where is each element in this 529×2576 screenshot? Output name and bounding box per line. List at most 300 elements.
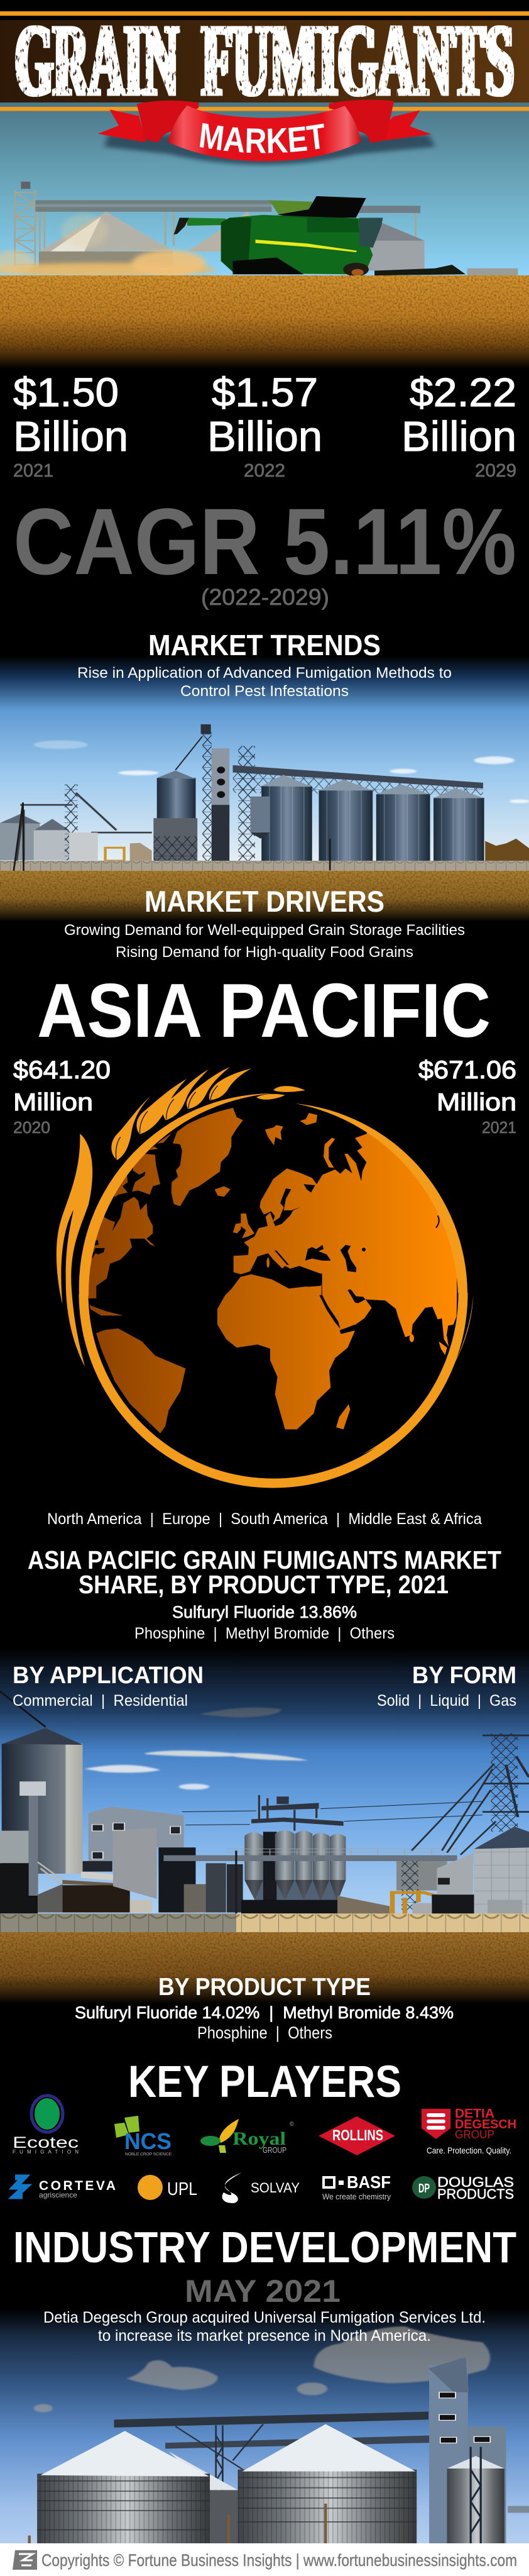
- shield bars: [428, 2115, 444, 2128]
- Canada and United States: [86, 1197, 155, 1298]
- footer: [0, 2543, 529, 2576]
- Mediterranean: [241, 1253, 322, 1288]
- unit: Billion: [401, 413, 516, 460]
- tower top: [428, 2357, 469, 2392]
- highlighted share: Sulfuryl Fluoride 13.86%: [172, 1603, 357, 1622]
- logo: NCS: [114, 2116, 172, 2157]
- dark lower left: [0, 1863, 38, 1913]
- name line two: DEGESCH: [455, 2118, 516, 2131]
- left blade: [57, 1134, 92, 1367]
- left silo ribs: [37, 2474, 210, 2543]
- illustration: silos and combine harvester: [0, 182, 518, 277]
- name line one: DETIA: [455, 2107, 494, 2121]
- ring left taper: [79, 1093, 271, 1295]
- small cloud: [84, 1765, 160, 1772]
- emblem: [412, 2176, 436, 2199]
- shed roof: [62, 1880, 131, 1886]
- combine: rear wheel: [343, 263, 369, 276]
- year: 2021: [13, 461, 53, 481]
- logo block: [13, 2550, 37, 2570]
- poles: [30, 2504, 325, 2543]
- Persian Gulf: [347, 1290, 366, 1303]
- hopper: [250, 832, 270, 839]
- mid silo 1: [244, 1832, 263, 1900]
- illustration: industrial facility: [0, 1691, 529, 1936]
- clouds: [34, 741, 529, 803]
- left fence: [0, 1913, 236, 1933]
- ground texture: [0, 871, 529, 909]
- wheat texture: [0, 275, 529, 351]
- subtitle: agriscience: [39, 2191, 77, 2199]
- Americas west: detailed land: [86, 1105, 243, 1298]
- tagline: Care. Protection. Quality.: [427, 2145, 511, 2155]
- ribbon shadow: [104, 135, 435, 165]
- fruit: [138, 2175, 163, 2200]
- right silo bands: [238, 2477, 417, 2522]
- items: Commercial | Residential: [13, 1692, 188, 1710]
- pole: [235, 1850, 237, 1933]
- logo: Royal Group: [200, 2119, 294, 2155]
- combine: body shadow: [221, 218, 251, 272]
- stat 2021: [13, 370, 128, 481]
- name line three: GROUP: [455, 2128, 494, 2141]
- combine: auger: [187, 218, 226, 226]
- right silo panels: [474, 1847, 529, 1920]
- clouds: [34, 2326, 490, 2413]
- grain 3: [163, 1070, 209, 1120]
- small cloud two: [179, 1784, 209, 1789]
- wordmark: UPL: [167, 2179, 197, 2199]
- by form: [377, 1662, 516, 1710]
- White Sea: [303, 1184, 315, 1193]
- tower head: [201, 724, 211, 734]
- value: $671.06: [418, 1056, 516, 1084]
- Cuba and Antilles: [89, 1305, 123, 1315]
- second small silo cone: [35, 819, 69, 830]
- leaves: [114, 2116, 139, 2138]
- yellow frame: [106, 848, 124, 861]
- unit: Billion: [207, 413, 322, 460]
- year: 2022: [244, 461, 285, 481]
- value: $2.22: [410, 370, 516, 415]
- panel: segmentation photo: [0, 1649, 529, 2042]
- right gantry: [357, 206, 420, 213]
- ring right taper: [295, 1103, 467, 1293]
- combine: upper panel: [266, 216, 359, 232]
- line one: Detia Degesch Group acquired Universal Fumigation Services Ltd.: [43, 2309, 486, 2326]
- Eurasia: [234, 1129, 457, 1347]
- wordmark: BASF: [347, 2172, 391, 2192]
- tower lattice: [202, 727, 212, 861]
- back building: [396, 1861, 447, 1891]
- gantry lattice: [233, 772, 483, 795]
- label curve: [198, 146, 329, 153]
- green leaf: [200, 2136, 221, 2146]
- subtitle: NOBLE CROP SCIENCE: [125, 2153, 172, 2157]
- grain 2: [136, 1079, 187, 1134]
- mid silo 4: [313, 1833, 329, 1901]
- trees: [485, 839, 529, 865]
- small silo lattice: [471, 2447, 481, 2543]
- Gulf of Thailand: [447, 1325, 454, 1338]
- date: MAY 2021: [185, 2274, 341, 2309]
- ribbon shapes: [98, 100, 435, 165]
- name line two: PRODUCTS: [437, 2186, 514, 2202]
- left lines: [15, 793, 152, 872]
- right silo: [474, 1847, 529, 1920]
- grain veins: [116, 1086, 218, 1159]
- Victoria Island: [111, 1174, 128, 1197]
- window 1: [439, 2392, 455, 2398]
- fence: [0, 861, 529, 872]
- left silo cone highlight: [51, 216, 101, 252]
- cables: [412, 1764, 496, 1855]
- distant fence: [467, 268, 518, 275]
- icon: wheat globe: [57, 1067, 473, 1483]
- tall silo: [157, 778, 195, 819]
- lower gantry: [165, 2436, 429, 2448]
- center band: [168, 106, 361, 161]
- small silo roof: [447, 2456, 504, 2468]
- conveyor rail: [226, 1849, 457, 1855]
- lower beam: [251, 1818, 344, 1826]
- logo: Solvay: [222, 2172, 300, 2203]
- rear building: [467, 2426, 506, 2543]
- Corsica and Sardinia: [266, 1258, 270, 1268]
- window two: [113, 1823, 124, 1830]
- silo 1 ribs: [261, 786, 312, 862]
- upper beam: [261, 1803, 319, 1810]
- back building lattice: [401, 1861, 418, 1911]
- panel: market size stats: [13, 370, 516, 610]
- emblem globe: [35, 2098, 60, 2130]
- window 4: [474, 2436, 490, 2442]
- cloud two: [314, 2326, 490, 2383]
- dark supports: [158, 1847, 195, 1913]
- value: $1.50: [13, 370, 119, 415]
- mid silo 3: [295, 1831, 312, 1900]
- silo 3 ribs: [376, 794, 430, 864]
- photo: sky: [0, 2309, 529, 2544]
- silo 4: [434, 798, 484, 865]
- illustration: silos: [30, 2326, 529, 2543]
- panel: industry development photo: [0, 2309, 529, 2544]
- right silo cone: [368, 223, 425, 241]
- left small silo cone: [0, 814, 41, 824]
- year: 2020: [13, 1118, 50, 1137]
- panel: market trends and drivers photo: [0, 629, 529, 961]
- wordmark: Ecotec: [13, 2134, 79, 2152]
- left fold: [136, 101, 199, 142]
- left silo roof: [40, 2431, 209, 2477]
- tower holes: [217, 766, 225, 798]
- big silo roof: [3, 1728, 83, 1745]
- silo 2 roof: [319, 780, 373, 790]
- Gulf of Aden: [340, 1325, 355, 1334]
- wordmark: ROLLINS: [332, 2127, 383, 2144]
- panel: header with harvest photo: [0, 4, 529, 367]
- wordmark: Royal: [232, 2128, 286, 2149]
- other product types: Phosphine | Methyl Bromide | Others: [134, 1625, 395, 1642]
- South America and Caribbean: [89, 1305, 185, 1434]
- icon: Fortune Business Insights logo: [13, 2550, 37, 2570]
- shed wall: [38, 1884, 62, 1913]
- dark block: [432, 1894, 488, 1918]
- mid silo 2: [275, 1830, 295, 1900]
- tower: [429, 2365, 468, 2543]
- cloud three: [297, 2382, 327, 2396]
- roof behind: [184, 1884, 206, 1913]
- left tower: [15, 190, 416, 272]
- tower panel: [212, 748, 229, 821]
- Novaya Zemlya: [324, 1137, 335, 1168]
- dust cloud: [0, 214, 216, 277]
- right fold: [329, 100, 394, 143]
- logo: UPL: [138, 2175, 197, 2200]
- title: grain fumigants: GRAIN: [15, 4, 178, 117]
- lattice box: [19, 1781, 46, 1796]
- silo 2 ribs: [319, 790, 373, 863]
- small dark silo 1: [206, 1863, 226, 1913]
- Adriatic: [275, 1250, 289, 1265]
- long bright cloud: [145, 1750, 308, 1761]
- pale block: [412, 1903, 432, 1916]
- logo: BASF: [322, 2172, 391, 2201]
- driver two: Rising Demand for High-quality Food Grains: [116, 944, 413, 961]
- heading: key players: KEY PLAYERS: [128, 2057, 401, 2107]
- Eurasia and Africa: detailed land: [215, 1113, 457, 1429]
- combine: spout: [174, 218, 189, 235]
- small dark silo 2: [227, 1864, 243, 1913]
- Greenland: [172, 1105, 243, 1206]
- right pipe: [508, 2506, 529, 2512]
- middle silo cone: [187, 212, 270, 252]
- left small silo: [0, 823, 40, 860]
- Sri Lanka: [410, 1334, 414, 1342]
- small stone wall: [130, 1900, 152, 1913]
- swoosh: [222, 2172, 242, 2203]
- photo: sky: [0, 1649, 529, 1933]
- silo 4 ribs: [434, 798, 484, 865]
- house window: [438, 1878, 450, 1884]
- left silo body: [39, 252, 173, 268]
- foreground pole: [13, 802, 330, 872]
- fence detail: [0, 861, 529, 872]
- front small silo: [250, 797, 270, 832]
- Madagascar: [336, 1404, 350, 1429]
- logo: Douglas Products: [412, 2174, 514, 2202]
- Sumatra sliver: [439, 1341, 447, 1355]
- grain 5: [209, 1068, 251, 1100]
- Africa: [217, 1274, 355, 1429]
- mid silos base: [241, 1900, 357, 1913]
- lower orange stripe: [0, 107, 529, 111]
- logo: Rollins: [319, 2116, 395, 2155]
- logo cut: [19, 2554, 33, 2565]
- diamond: [319, 2116, 395, 2155]
- photo: ground: [0, 871, 529, 922]
- mid silo 5: [330, 1834, 346, 1902]
- Franz Josef Land: [300, 1113, 317, 1125]
- left lattice tower: [65, 785, 78, 860]
- name line one: DOUGLAS: [437, 2174, 514, 2190]
- left silo body: [37, 2474, 210, 2543]
- wheat blades: [57, 1086, 473, 1454]
- photo: wheat field: [0, 275, 529, 368]
- lower leaf: [219, 2145, 226, 2153]
- title banner: [0, 20, 529, 102]
- heading: market trends: MARKET TRENDS: [148, 629, 381, 661]
- heading: market drivers: MARKET DRIVERS: [145, 885, 384, 918]
- right silo roof: [243, 2424, 416, 2472]
- development text: [43, 2309, 486, 2345]
- panel: Asia Pacific region: [13, 968, 516, 1642]
- tagline: We create chemistry: [322, 2192, 391, 2201]
- gantry gaps: [35, 204, 271, 207]
- building A: [89, 1806, 184, 1861]
- Iceland: [215, 1186, 231, 1197]
- Baffin Island: [132, 1154, 160, 1195]
- footer background: [0, 2543, 529, 2576]
- orange frame: [393, 1891, 444, 1915]
- right silo cone: [474, 1827, 529, 1849]
- subtitle: FUMIGATION: [13, 2149, 79, 2155]
- silo 3: [376, 794, 430, 864]
- wordmark: SOLVAY: [251, 2180, 300, 2196]
- wordmark: NCS: [124, 2128, 172, 2154]
- tall silo base: [153, 818, 197, 861]
- driver one: Growing Demand for Well-equipped Grain Storage Facilities: [64, 922, 465, 939]
- cloud four: [34, 2404, 53, 2413]
- silo 3 roof: [376, 785, 430, 794]
- trend line one: Rise in Application of Advanced Fumigation Methods to: [77, 665, 452, 682]
- Baltic: [273, 1188, 300, 1226]
- rear silo roof: [168, 2452, 238, 2490]
- CAGR period: (2022-2029): [201, 584, 329, 610]
- stay wire: [175, 736, 202, 770]
- logo: Ecotec: [13, 2096, 79, 2155]
- drivers text: [64, 922, 465, 961]
- fence detail: [0, 1913, 529, 1933]
- copyright mark: ©: [290, 2121, 294, 2127]
- photo: sky: [0, 102, 529, 276]
- grain 4: [187, 1067, 230, 1109]
- upper gantry: [114, 2412, 428, 2428]
- heading: market share: [28, 1545, 501, 1599]
- combine: header: [374, 265, 466, 275]
- wordmark: CORTEVA: [39, 2179, 117, 2193]
- year: 2029: [475, 461, 516, 481]
- big silo: [2, 1744, 83, 1874]
- low building: [69, 832, 98, 860]
- left silo bands: [37, 2481, 210, 2530]
- Red Sea: [319, 1295, 341, 1329]
- left shed: [0, 1831, 29, 1863]
- solid square: [339, 2181, 344, 2185]
- top grain 7: [256, 1094, 285, 1100]
- emblem: [15, 2177, 25, 2196]
- gantry: [35, 200, 271, 212]
- legs: [258, 1795, 317, 1831]
- ribbon: market: [98, 99, 437, 167]
- building A base: [83, 1861, 112, 1872]
- lattice: [175, 2424, 263, 2543]
- window 2: [439, 2414, 455, 2420]
- top orange stripe: [0, 11, 529, 16]
- house: [437, 1853, 473, 1894]
- unit: Billion: [13, 413, 128, 460]
- rear silo: [210, 2490, 238, 2543]
- window one: [92, 1825, 103, 1831]
- grain 1: [111, 1097, 150, 1160]
- heading: BY APPLICATION: [13, 1662, 204, 1689]
- balcony: [81, 1872, 135, 1882]
- trend text: [77, 665, 452, 700]
- combine: yellow stripe: [256, 240, 357, 252]
- by product type: [75, 1974, 454, 2042]
- stat 2029: [401, 370, 516, 481]
- panel: key players: [13, 2057, 516, 2309]
- combine: wheel hub: [352, 269, 364, 276]
- emblem letters: DP: [418, 2182, 430, 2196]
- lattice column: [29, 1795, 38, 1896]
- silo 1 roof: [261, 775, 312, 787]
- tower lower: [212, 805, 229, 861]
- hopper box: [276, 1796, 289, 1804]
- arctic strip: [146, 1112, 201, 1150]
- tall silo base lattice: [153, 836, 197, 861]
- silo 2: [319, 790, 373, 863]
- wires: [182, 1801, 483, 1825]
- shed shadow: [62, 1885, 130, 1913]
- right silo body: [238, 2470, 417, 2543]
- windows: [92, 1823, 180, 1859]
- right tower arms: [483, 1735, 529, 1817]
- items: Solid | Liquid | Gas: [377, 1692, 516, 1710]
- window 3: [440, 2437, 457, 2443]
- Black Sea: [305, 1245, 331, 1261]
- Great Lakes: [91, 1240, 105, 1259]
- trend line two: Control Pest Infestations: [180, 683, 349, 700]
- Aral Sea: [362, 1247, 366, 1251]
- outer right blade: [363, 1295, 473, 1454]
- other types: Phosphine | Others: [197, 2023, 332, 2042]
- heading: BY FORM: [412, 1662, 516, 1689]
- window four: [92, 1852, 103, 1859]
- emblem ring: [31, 2096, 63, 2132]
- right base: [488, 1900, 522, 1919]
- yellow leaf: [219, 2119, 239, 2143]
- title: grain fumigants: [15, 4, 514, 117]
- grey roof: [337, 1896, 390, 1915]
- heading: BY PRODUCT TYPE: [158, 1974, 371, 2001]
- right silo ribs: [238, 2470, 417, 2543]
- clouds: [84, 1708, 308, 1789]
- British Isles: [241, 1213, 254, 1238]
- shares: Sulfuryl Fluoride 14.02% | Methyl Bromide 8.43%: [75, 2003, 454, 2022]
- wheat leaves: [111, 1067, 251, 1160]
- logo: Corteva: [15, 2177, 117, 2199]
- Ireland: [233, 1223, 241, 1234]
- ground texture: [0, 1932, 529, 1986]
- subtitle: GROUP: [263, 2145, 286, 2155]
- hopper shade: [244, 1880, 346, 1902]
- other regions list: North America | Europe | South America | Middle East & Africa: [47, 1510, 482, 1528]
- heading: Asia Pacific: ASIA PACIFIC: [37, 968, 491, 1053]
- heading line two: SHARE, BY PRODUCT TYPE, 2021: [79, 1570, 449, 1599]
- small silo body: [447, 2468, 504, 2543]
- cloud one: [126, 2360, 217, 2390]
